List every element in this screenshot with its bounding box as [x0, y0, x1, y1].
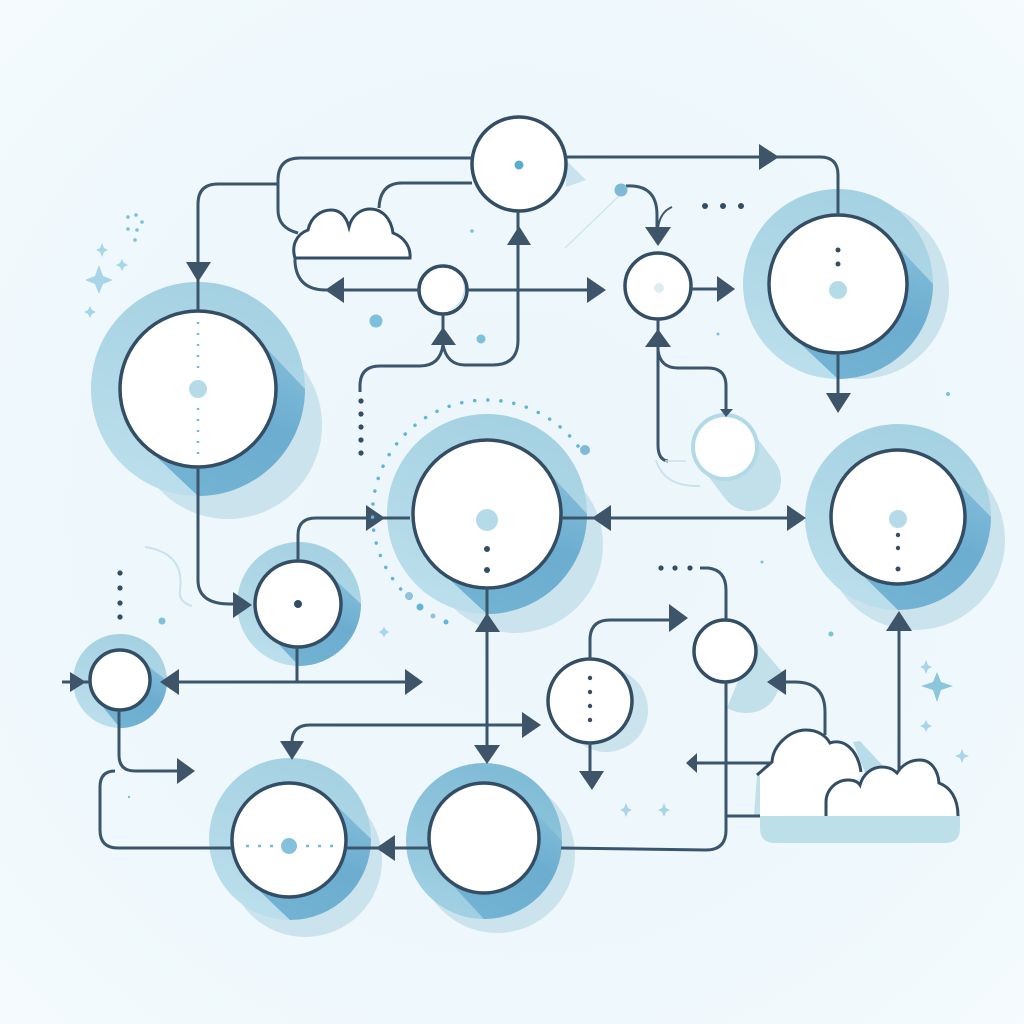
node: small center circle — [419, 266, 467, 314]
node: lower middle circle with dots — [548, 659, 648, 752]
node: upper right small circle — [625, 253, 691, 319]
node: top circle — [472, 117, 586, 211]
connector lines — [62, 157, 899, 850]
node: bottom left circle — [209, 758, 382, 937]
pale wisps — [145, 460, 700, 606]
node: center large circle — [387, 414, 603, 633]
cloud: bottom pair — [754, 730, 960, 843]
node: small circle right of center — [694, 620, 782, 713]
accent dots and sparkles — [84, 184, 969, 817]
arrowheads — [70, 144, 912, 861]
cloud: top — [294, 209, 410, 258]
node: pale circle with shadow — [691, 413, 759, 481]
dotted arc around center node — [373, 400, 590, 624]
node: top right large circle — [743, 189, 949, 379]
node: left large circle — [91, 282, 322, 519]
node: mid left circle — [237, 542, 361, 666]
dark dotted accents — [117, 203, 744, 620]
node: far left small circle — [73, 634, 167, 728]
node: right large circle — [805, 424, 1005, 630]
node: bottom center circle — [406, 763, 575, 933]
